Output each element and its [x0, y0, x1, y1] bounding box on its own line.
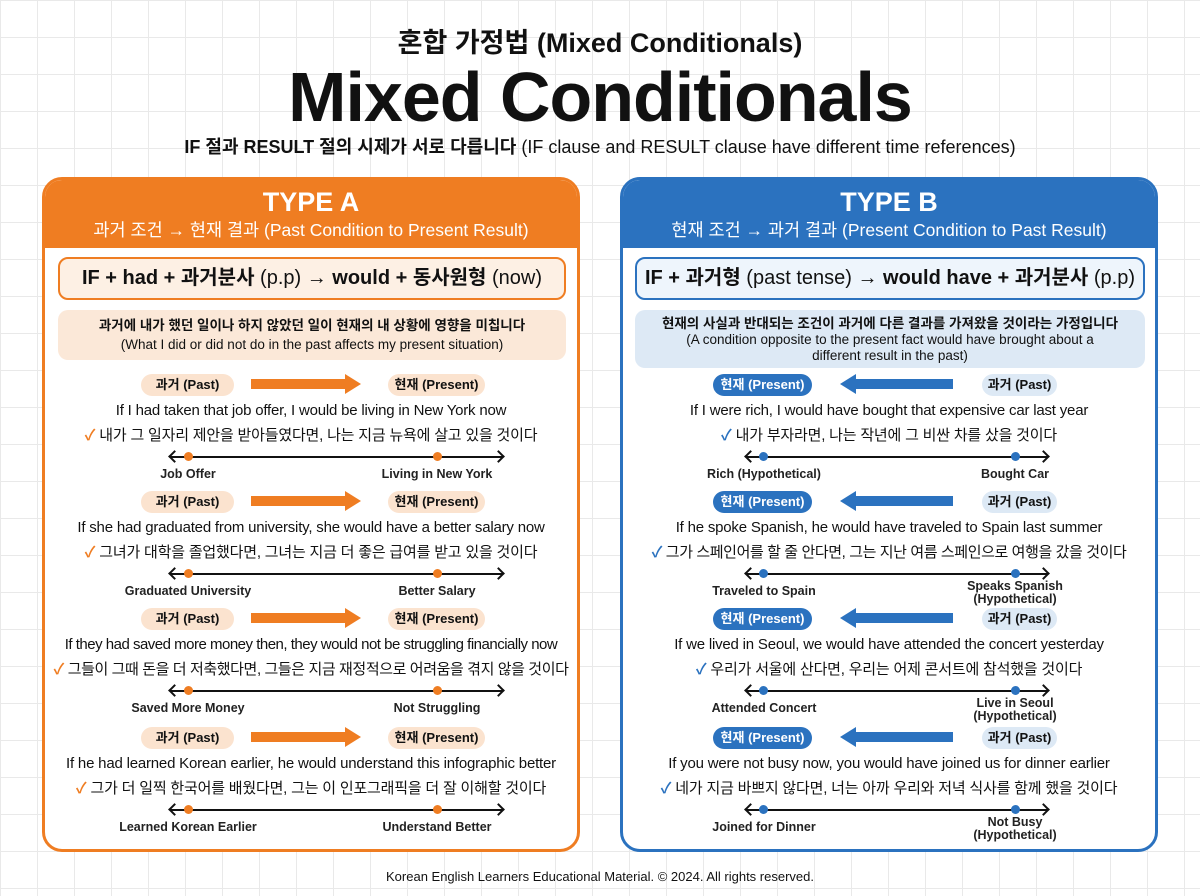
header A — [45, 180, 577, 248]
description B — [635, 310, 1145, 368]
description A: (What I did or did not do in the past affects my present situation) — [121, 337, 503, 352]
example B1: Rich (Hypothetical) — [707, 467, 821, 481]
example B3: 현재 (Present) — [721, 611, 804, 626]
example A1: ✓ 내가 그 일자리 제안을 받아들였다면, 나는 지금 뉴욕에 살고 있을 것이다 — [85, 427, 537, 444]
description A: 과거에 내가 했던 일이나 하지 않았던 일이 현재의 내 상황에 영향을 미칩니다 — [99, 318, 525, 333]
example B4 — [660, 727, 1118, 842]
panel: type B — [620, 177, 1158, 852]
example A3: 과거 (Past) — [156, 611, 219, 626]
example A1 — [84, 374, 538, 481]
example B2 — [652, 491, 1126, 606]
example A4: Learned Korean Earlier — [119, 820, 257, 834]
example A2: Graduated University — [125, 584, 251, 598]
example A3: Not Struggling — [394, 701, 480, 715]
example B3: If we lived in Seoul, we would have attended the concert yesterday — [674, 636, 1104, 653]
formula A — [58, 257, 566, 300]
example A1: 과거 (Past) — [156, 377, 219, 392]
example B2: If he spoke Spanish, he would have traveled to Spain last summer — [676, 519, 1102, 536]
example B4: (Hypothetical) — [973, 828, 1057, 842]
example B3 — [674, 608, 1104, 723]
footer: Korean English Learners Educational Material. © 2024. All rights reserved. — [386, 869, 814, 884]
example A1: If I had taken that job offer, I would be living in New York now — [116, 402, 506, 419]
example A1: Living in New York — [382, 467, 492, 481]
main title: Mixed Conditionals — [288, 58, 912, 136]
description B: 현재의 사실과 반대되는 조건이 과거에 다른 결과를 가져왔을 것이라는 가정입니다 — [662, 316, 1118, 331]
description B: (A condition opposite to the present fact would have brought about a — [686, 332, 1094, 347]
example A4: 현재 (Present) — [395, 730, 478, 745]
example B2: Speaks Spanish — [967, 579, 1063, 593]
example B4: 현재 (Present) — [721, 730, 804, 745]
header B: 현재 조건 → 과거 결과 (Present Condition to Past Result) — [671, 220, 1107, 240]
example B1: 현재 (Present) — [721, 377, 804, 392]
subtitle: IF 절과 RESULT 절의 시제가 서로 다릅니다 (IF clause and RESULT clause have different time references) — [184, 137, 1016, 157]
description A — [58, 310, 566, 360]
example A4 — [66, 727, 556, 834]
example B1: Bought Car — [981, 467, 1049, 481]
example B1: 과거 (Past) — [988, 377, 1051, 392]
example B4: If you were not busy now, you would have joined us for dinner earlier — [668, 755, 1110, 772]
formula B — [635, 257, 1145, 300]
example B2: (Hypothetical) — [973, 592, 1057, 606]
example A2: ✓ 그녀가 대학을 졸업했다면, 그녀는 지금 더 좋은 급여를 받고 있을 것이다 — [85, 544, 537, 561]
header A: TYPE A — [263, 187, 359, 217]
example B2: ✓ 그가 스페인어를 할 줄 안다면, 그는 지난 여름 스페인으로 여행을 갔을 것이다 — [652, 544, 1126, 561]
example B3: Live in Seoul — [976, 696, 1054, 710]
example A4: If he had learned Korean earlier, he would understand this infographic better — [66, 755, 556, 772]
example A2 — [77, 491, 545, 598]
example B2: Traveled to Spain — [712, 584, 816, 598]
header B — [623, 180, 1155, 248]
header B: TYPE B — [840, 187, 938, 217]
example B4: 과거 (Past) — [988, 730, 1051, 745]
example A4: 과거 (Past) — [156, 730, 219, 745]
panel: type A — [42, 177, 580, 852]
example A3: ✓ 그들이 그때 돈을 더 저축했다면, 그들은 지금 재정적으로 어려움을 겪지 않을 것이다 — [53, 661, 569, 678]
example B3: Attended Concert — [712, 701, 816, 715]
example B2: 과거 (Past) — [988, 494, 1051, 509]
example B4: Not Busy — [988, 815, 1042, 829]
formula A: IF + had + 과거분사 (p.p) → would + 동사원형 (now) — [82, 267, 542, 289]
example A3: 현재 (Present) — [395, 611, 478, 626]
example A4: ✓ 그가 더 일찍 한국어를 배웠다면, 그는 이 인포그래픽을 더 잘 이해할 것이다 — [76, 780, 546, 797]
example B3: 과거 (Past) — [988, 611, 1051, 626]
example A1: Job Offer — [160, 467, 216, 481]
example A3 — [53, 608, 569, 715]
example B1: If I were rich, I would have bought that expensive car last year — [690, 402, 1088, 419]
description B: different result in the past) — [812, 348, 968, 363]
header A: 과거 조건 → 현재 결과 (Past Condition to Present Result) — [93, 220, 529, 240]
example B2: 현재 (Present) — [721, 494, 804, 509]
example B1 — [690, 374, 1088, 481]
example B3: ✓ 우리가 서울에 산다면, 우리는 어제 콘서트에 참석했을 것이다 — [696, 661, 1082, 678]
example A2: Better Salary — [398, 584, 476, 598]
example A2: If she had graduated from university, she would have a better salary now — [77, 519, 545, 536]
example B4: Joined for Dinner — [712, 820, 816, 834]
example A3: If they had saved more money then, they would not be struggling financially now — [65, 636, 557, 653]
title korean: 혼합 가정법 (Mixed Conditionals) — [398, 28, 802, 58]
example A1: 현재 (Present) — [395, 377, 478, 392]
example A3: Saved More Money — [131, 701, 245, 715]
example A2: 과거 (Past) — [156, 494, 219, 509]
formula B: IF + 과거형 (past tense) → would have + 과거분사 (p.p) — [645, 267, 1135, 289]
example B3: (Hypothetical) — [973, 709, 1057, 723]
example A4: Understand Better — [382, 820, 492, 834]
example B4: ✓ 네가 지금 바쁘지 않다면, 너는 아까 우리와 저녁 식사를 함께 했을 것이다 — [661, 780, 1117, 797]
example B1: ✓ 내가 부자라면, 나는 작년에 그 비싼 차를 샀을 것이다 — [721, 427, 1057, 444]
example A2: 현재 (Present) — [395, 494, 478, 509]
